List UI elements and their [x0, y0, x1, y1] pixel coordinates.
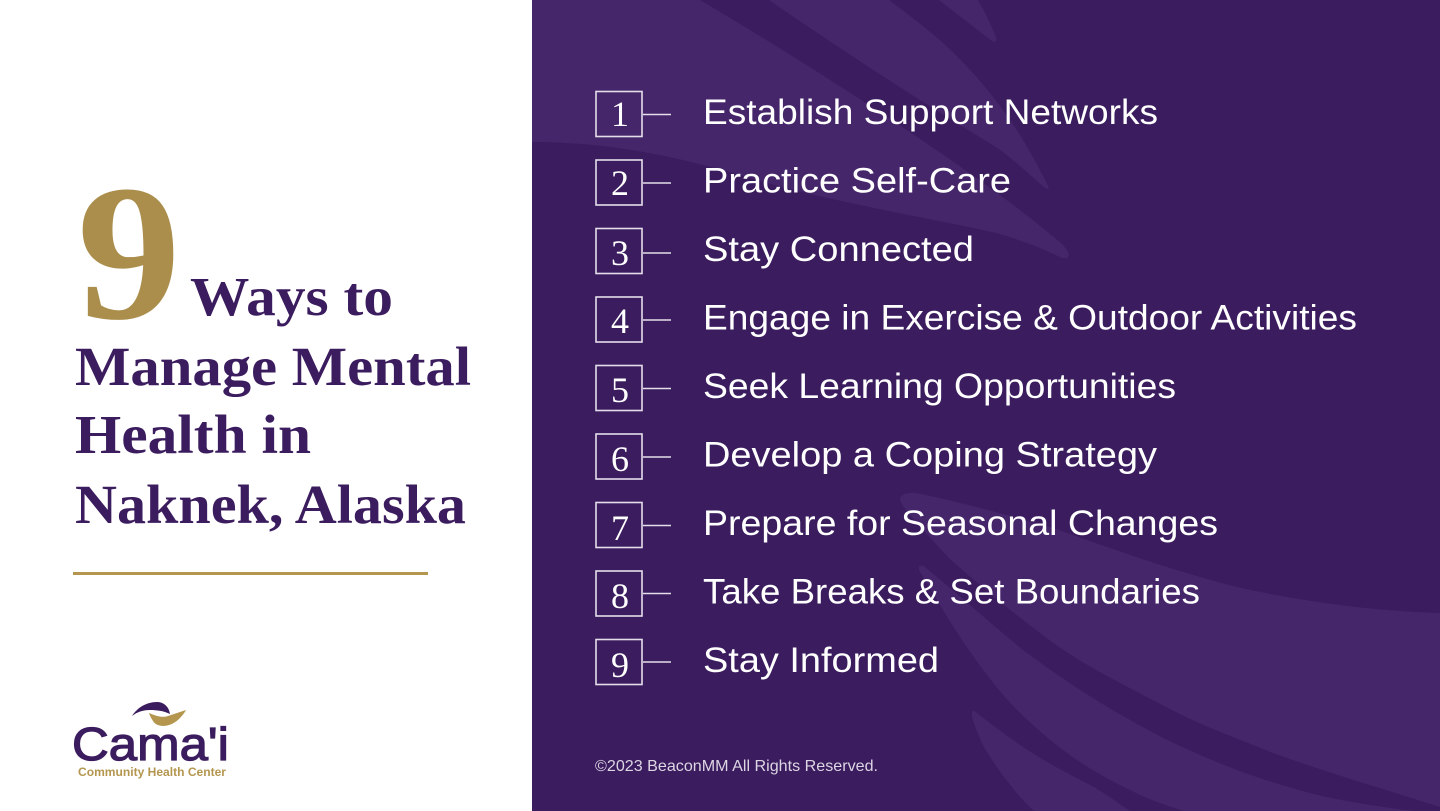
item 2: 2 [611, 163, 629, 203]
item 7: 7 [611, 508, 629, 548]
title line 3: Health in [75, 404, 311, 465]
item 1: Establish Support Networks [703, 93, 1158, 132]
item 5: 5 [611, 370, 629, 410]
title line 4: Naknek, Alaska [75, 474, 466, 535]
gold rule [73, 572, 428, 575]
title line 2: Manage Mental [75, 336, 471, 397]
heading: title block [75, 146, 471, 535]
item 3: Stay Connected [703, 230, 974, 269]
item 7: Prepare for Seasonal Changes [703, 504, 1218, 543]
background feather shapes [532, 0, 1440, 811]
big number 9: 9 [77, 146, 181, 360]
item 8 [596, 571, 1200, 616]
logo: Cama'i Community Health Center [72, 702, 229, 779]
panel: right purple panel [532, 0, 1440, 811]
item 8: 8 [611, 576, 629, 616]
item 9 [596, 640, 939, 685]
title line 1: Ways to [190, 266, 393, 327]
item 8: Take Breaks & Set Boundaries [703, 572, 1200, 612]
panel: left white panel [0, 0, 532, 811]
item 9: 9 [611, 645, 629, 685]
item 4: Engage in Exercise & Outdoor Activities [703, 298, 1357, 338]
item 6 [596, 434, 1158, 479]
icon: gold swoosh [149, 710, 186, 726]
copyright footer: ©2023 BeaconMM All Rights Reserved. [595, 758, 878, 775]
item 3 [596, 228, 974, 274]
icon: purple swoosh [132, 702, 170, 716]
logo tagline: Community Health Center [78, 767, 227, 779]
item 2 [596, 160, 1011, 205]
item 5 [596, 366, 1176, 410]
item 7 [596, 502, 1218, 548]
item 1: 1 [611, 94, 629, 134]
item 9: Stay Informed [703, 641, 939, 680]
item 4: 4 [611, 301, 629, 341]
item 3: 3 [611, 233, 629, 273]
item 2: Practice Self-Care [703, 162, 1011, 200]
logo wordmark: Cama'i [72, 718, 229, 770]
item 1 [596, 92, 1158, 136]
item 5: Seek Learning Opportunities [703, 367, 1176, 406]
list: nine ways [596, 92, 1357, 685]
item 6: 6 [611, 439, 629, 479]
item 6: Develop a Coping Strategy [703, 436, 1158, 474]
